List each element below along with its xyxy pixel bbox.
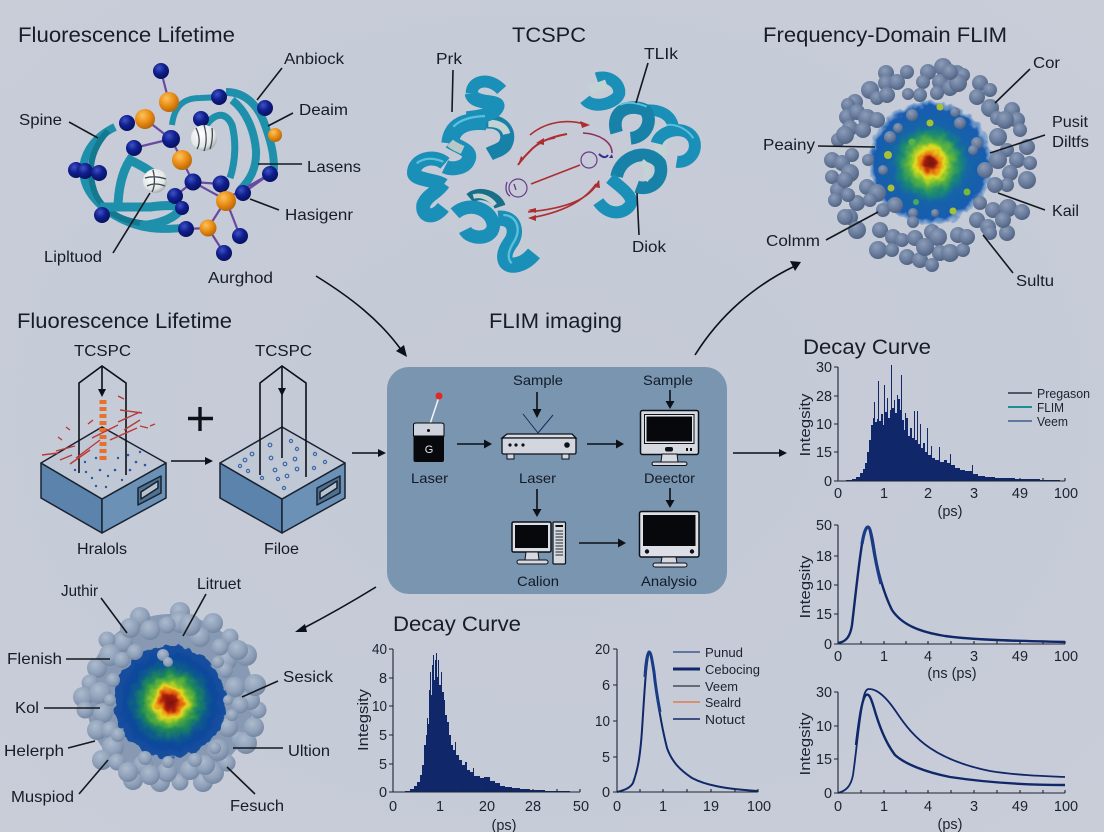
histogram chart: 8: [379, 671, 387, 687]
line chart bottom: 4: [924, 799, 932, 815]
frequency labels: [763, 55, 1089, 290]
histogram chart: 20: [479, 799, 495, 815]
flow labels: Calion: [517, 573, 559, 589]
arrow: box two to panel: [352, 449, 386, 457]
histogram chart top: 49: [1012, 486, 1028, 502]
line chart: 0: [613, 799, 621, 815]
panel: frequency-domain FLIM: [763, 24, 1089, 290]
heading: fluorescence lifetime second: Fluorescence Lifetime: [17, 310, 232, 333]
leader labels: Spine: [19, 112, 62, 129]
heading: decay curve: Decay Curve: [393, 613, 521, 636]
heading: frequency-domain FLIM: Frequency-Domain FLIM: [763, 24, 1007, 47]
histogram chart: 28: [525, 799, 541, 815]
protein shell: [73, 602, 266, 792]
line chart middle: 49: [1012, 649, 1028, 665]
panel: decay curve charts bottom centre: [356, 613, 771, 832]
protein labels: Juthir: [61, 583, 99, 600]
line chart bottom: 0: [834, 799, 842, 815]
histogram chart top: 15: [816, 445, 832, 461]
frequency labels: Diltfs: [1052, 134, 1089, 151]
flow arrows: [457, 390, 674, 548]
icon: laser: [414, 392, 444, 462]
line chart middle: 10: [816, 578, 832, 594]
flow labels: Sample: [513, 372, 563, 388]
frequency labels: Pusit: [1052, 114, 1089, 131]
line chart middle: Integsity: [798, 555, 814, 618]
box labels: Hralols: [77, 541, 127, 558]
icon: router: [502, 414, 576, 459]
line chart bottom: 30: [816, 685, 832, 701]
heading: decay curve right: Decay Curve: [803, 336, 931, 359]
histogram chart: 10: [372, 699, 387, 715]
line chart: [595, 642, 771, 815]
box labels: TCSPC: [255, 343, 312, 360]
leader labels: Lipltuod: [44, 249, 102, 266]
helix left: [414, 82, 534, 265]
line chart bottom: Integsity: [798, 712, 814, 775]
chart legend: Cebocing: [705, 663, 760, 677]
histogram chart: Integsity: [356, 688, 372, 751]
legend top: Pregason: [1037, 387, 1090, 401]
frequency labels: Cor: [1033, 55, 1061, 72]
arrow: instrument to frequency-domain: [695, 261, 801, 355]
line chart bottom: 0: [824, 786, 832, 802]
heat map: [114, 646, 226, 758]
helix right: [585, 77, 695, 212]
histogram chart top: 30: [816, 360, 832, 376]
histogram chart top: 28: [816, 389, 832, 405]
line chart bottom: 100: [1054, 799, 1078, 815]
protein labels: Fesuch: [230, 798, 284, 815]
line chart middle: 50: [816, 518, 832, 534]
line chart middle: 4: [924, 649, 932, 665]
line chart middle: 100: [1054, 649, 1078, 665]
panel: decay curve charts right: [798, 336, 1090, 832]
line chart bottom: 10: [816, 719, 832, 735]
heat map core: [868, 101, 992, 225]
histogram chart top: 0: [824, 474, 832, 490]
legend top: FLIM: [1037, 401, 1064, 415]
box labels: Filoe: [264, 541, 299, 558]
protein labels: [4, 576, 334, 815]
line chart: 0: [602, 785, 610, 801]
protein shell overlap: [104, 644, 238, 768]
heading: TCSPC: TCSPC: [512, 24, 586, 47]
bright spots: [884, 104, 970, 214]
box two: [220, 427, 345, 533]
line chart: 5: [602, 750, 610, 766]
icon: laser: G: [425, 444, 433, 456]
flow labels: Sample: [643, 372, 693, 388]
helix labels: [436, 46, 679, 256]
leader labels: Anbiock: [284, 51, 345, 68]
helix labels: TLIk: [644, 46, 679, 63]
legend top: Veem: [1037, 415, 1068, 429]
panel: FLIM instrument flow: [387, 367, 727, 594]
histogram chart: 50: [573, 799, 589, 815]
line chart: 100: [747, 799, 771, 815]
histogram chart: [356, 642, 589, 832]
histogram chart top: 10: [816, 417, 832, 433]
icon: analysis monitor: [640, 512, 699, 567]
histogram chart: 0: [379, 785, 387, 801]
line chart middle: 0: [834, 649, 842, 665]
histogram chart top: 0: [834, 486, 842, 502]
line chart middle: 18: [816, 549, 832, 565]
line chart bottom: 49: [1012, 799, 1028, 815]
line chart middle: 0: [824, 637, 832, 653]
line chart middle: [798, 518, 1078, 682]
protein labels: Muspiod: [11, 789, 74, 806]
protein labels: Flenish: [7, 651, 62, 668]
legend top: [1008, 387, 1090, 429]
leader labels: Lasens: [307, 159, 361, 176]
ribbon strands: [83, 92, 274, 229]
box one: [41, 427, 166, 533]
histogram chart top: 3: [970, 486, 978, 502]
icon: computer: [512, 522, 566, 564]
histogram chart: 0: [389, 799, 397, 815]
line chart: 1: [659, 799, 667, 815]
panel: molecule: [18, 24, 361, 287]
line chart middle: 3: [970, 649, 978, 665]
frequency labels: Kail: [1052, 203, 1079, 220]
leader labels: Deaim: [299, 102, 348, 119]
flow labels: [411, 372, 697, 589]
protein labels: Sesick: [283, 669, 334, 686]
panel: protein with lifetime map: [4, 576, 334, 815]
flow labels: Analysio: [641, 573, 697, 589]
helix labels: Prk: [436, 51, 463, 68]
line chart: 10: [595, 714, 610, 730]
line chart middle: 1: [880, 649, 888, 665]
panel: sample boxes: [17, 310, 386, 558]
histogram chart top: [798, 360, 1078, 520]
box labels: TCSPC: [74, 343, 131, 360]
leader labels: Hasigenr: [285, 207, 354, 224]
outer protein blobs: [824, 58, 1037, 272]
histogram chart top: 2: [924, 486, 932, 502]
icon: detector monitor: [640, 410, 698, 466]
histogram chart top: 1: [880, 486, 888, 502]
arrow: instrument to decay curve: [733, 449, 787, 457]
leader labels: Aurghod: [208, 270, 273, 287]
atoms: [68, 63, 282, 261]
line chart: 19: [703, 799, 719, 815]
line chart: 20: [595, 642, 610, 658]
arrow: molecule to instrument: [316, 276, 407, 357]
frequency labels: Peainy: [763, 137, 815, 154]
flow labels: Laser: [411, 470, 448, 486]
arrow: instrument to protein: [295, 587, 376, 632]
panel: TCSPC helices: [414, 24, 695, 265]
histogram chart: 40: [372, 642, 387, 658]
arrow: box one to box two: [171, 457, 213, 465]
box two beam: [238, 366, 327, 490]
line chart bottom: [798, 685, 1078, 832]
histogram chart top: Integsity: [798, 393, 814, 456]
energy transfer arrows: [518, 122, 612, 218]
chart legend: Punud: [705, 646, 743, 660]
line chart: 6: [602, 678, 610, 694]
histogram chart top: 100: [1054, 486, 1078, 502]
heading: FLIM imaging: FLIM imaging: [489, 310, 622, 333]
protein labels: Ultion: [288, 743, 330, 760]
frequency labels: Colmm: [766, 233, 820, 250]
line chart bottom: 3: [970, 799, 978, 815]
chart legend: Notuct: [705, 713, 746, 727]
plus sign: [188, 407, 213, 431]
histogram chart: 1: [436, 799, 444, 815]
panel background: [387, 367, 727, 594]
flow labels: Deector: [644, 470, 695, 486]
histogram chart: 5: [379, 757, 387, 773]
heading: fluorescence lifetime: Fluorescence Lifetime: [18, 24, 235, 47]
inner protein blobs: [862, 86, 983, 228]
chart legend: [673, 646, 760, 727]
protein base: [86, 614, 254, 782]
protein labels: Litruet: [197, 576, 242, 593]
box labels: [74, 343, 312, 558]
flow labels: Laser: [519, 470, 556, 486]
line chart bottom: 1: [880, 799, 888, 815]
chart legend: Sealrd: [705, 696, 741, 710]
histogram chart top: (ps): [938, 504, 962, 520]
box one beam: [42, 366, 155, 488]
line chart bottom: 15: [816, 752, 832, 768]
chart legend: Veem: [705, 680, 738, 694]
line chart middle: (ns (ps): [927, 666, 977, 682]
arrowheads and rings: [506, 121, 613, 221]
leader labels: [19, 51, 361, 287]
bonds: [134, 71, 270, 253]
histogram chart: 5: [379, 728, 387, 744]
protein labels: Helerph: [4, 743, 64, 760]
helix labels: Diok: [632, 239, 667, 256]
protein labels: Kol: [15, 700, 39, 717]
line chart middle: 15: [816, 607, 832, 623]
frequency labels: Sultu: [1016, 273, 1054, 290]
